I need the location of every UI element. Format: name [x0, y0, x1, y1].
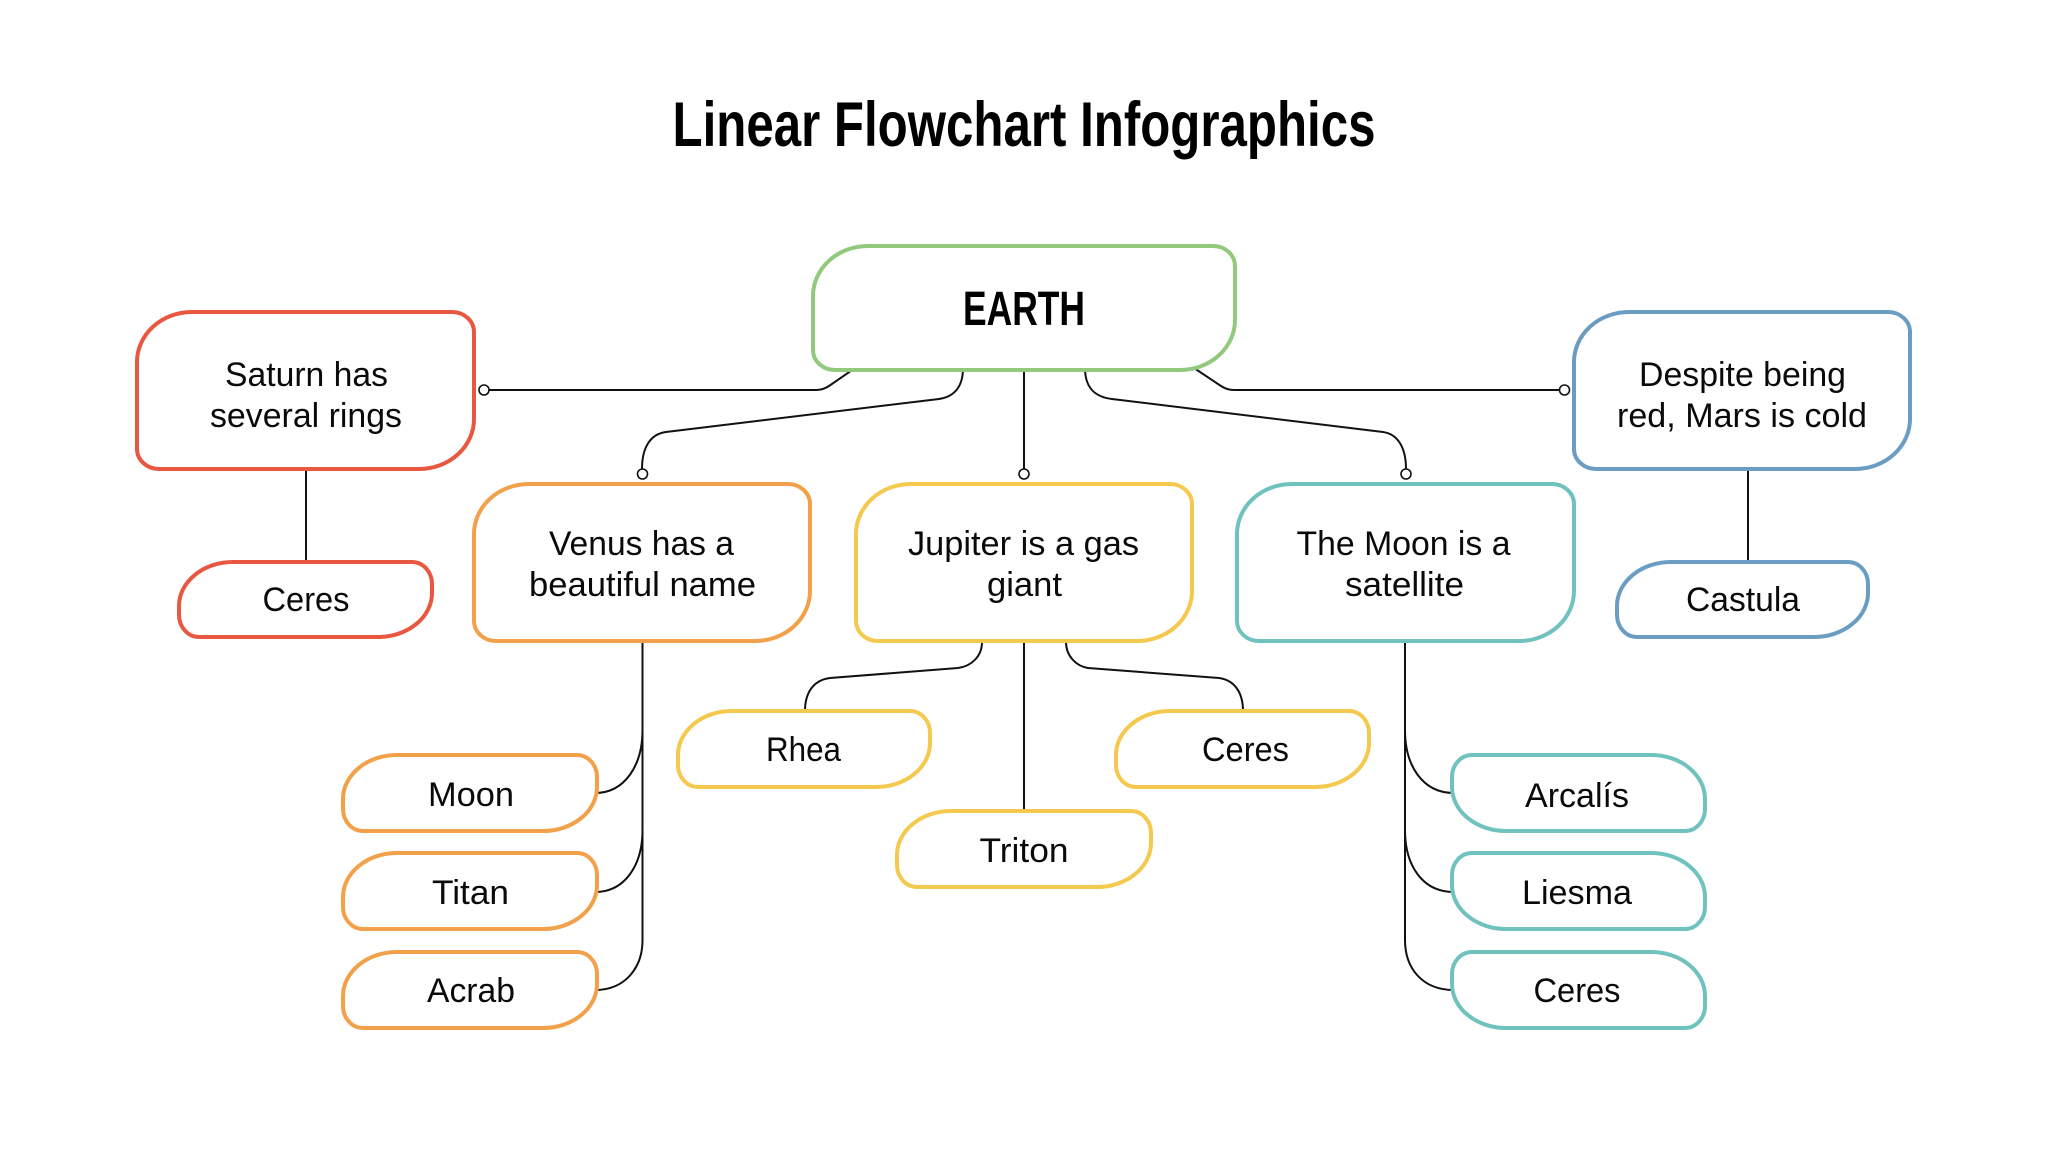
text: Mars: Despite being — [1639, 356, 1846, 394]
arrow: Saturn to Ceres — [305, 469, 307, 562]
panel: Moon orange — [343, 755, 597, 831]
text: Saturn: Saturn has — [225, 356, 388, 394]
text: Venus: Venus has a — [549, 525, 734, 563]
text: The Moon: satellite — [1345, 566, 1464, 604]
text: Jupiter: giant — [987, 566, 1063, 604]
text: Mars: red, Mars is cold — [1617, 397, 1867, 435]
panel: Titan — [343, 853, 597, 929]
title: Linear Flowchart Infographics — [672, 90, 1376, 160]
arrow: Moon branches — [1405, 642, 1454, 990]
panel: Saturn — [137, 312, 474, 469]
label: Ceres: Ceres — [262, 581, 350, 619]
text: Jupiter — [908, 525, 1139, 604]
connectors from Earth to main nodes — [479, 366, 1570, 479]
panel: Jupiter — [856, 484, 1192, 641]
arrow: Venus branches — [595, 642, 642, 990]
arrow: Jupiter to Triton — [1023, 642, 1025, 811]
panel: The Moon — [1237, 484, 1574, 641]
text: Saturn — [210, 356, 402, 435]
panel: Liesma — [1452, 853, 1705, 929]
label: Ceres: Ceres — [1202, 731, 1289, 769]
arrow: Earth to Mars — [1191, 366, 1570, 395]
text: Saturn: several rings — [210, 397, 402, 435]
label: Arcalis: Arcalís — [1525, 777, 1629, 815]
label: Rhea: Rhea — [766, 731, 841, 769]
label: Castula: Castula — [1686, 581, 1800, 619]
text: The Moon — [1296, 525, 1511, 604]
arrow: Earth to Saturn — [479, 366, 858, 395]
arrow: Mars to Castula — [1747, 469, 1749, 562]
panel: Earth — [813, 246, 1235, 370]
label: Liesma: Liesma — [1522, 874, 1632, 912]
arrow: Jupiter to Rhea — [805, 642, 982, 711]
text: Jupiter: Jupiter is a gas — [908, 525, 1139, 563]
label: Acrab: Acrab — [427, 972, 515, 1010]
panel: Venus — [474, 484, 810, 641]
panel: Triton — [897, 811, 1151, 887]
panel: Acrab — [343, 952, 597, 1028]
label: Triton: Triton — [980, 832, 1068, 870]
text: The Moon: The Moon is a — [1296, 525, 1511, 563]
panel: Rhea — [678, 711, 930, 787]
panel: Castula — [1617, 562, 1868, 637]
text: Venus: beautiful name — [529, 566, 756, 604]
arrow: Earth to Jupiter — [1019, 368, 1029, 479]
panel: Ceres yellow — [1116, 711, 1369, 787]
connectors to sub nodes — [306, 469, 1748, 990]
panel: Arcalis — [1452, 755, 1705, 831]
label: Ceres: Ceres — [1534, 972, 1620, 1010]
arrow: Jupiter to Ceres — [1066, 642, 1243, 711]
panel: Ceres red — [179, 562, 432, 637]
heading: Earth: EARTH — [963, 283, 1085, 336]
panel: Mars — [1574, 312, 1910, 469]
arrow: Earth to Moon — [1085, 368, 1411, 479]
label: Moon: Moon — [428, 776, 514, 814]
arrow: Earth to Venus — [638, 368, 963, 479]
text: Venus — [529, 525, 756, 604]
label: Titan: Titan — [432, 874, 509, 912]
text: Mars — [1617, 356, 1867, 435]
panel: Ceres teal — [1452, 952, 1705, 1028]
